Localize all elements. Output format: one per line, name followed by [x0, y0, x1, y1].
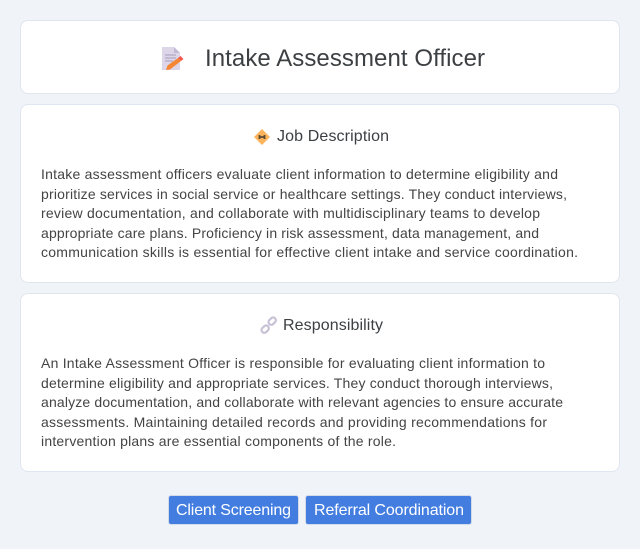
text: job description: prioritize services in social service or healthcare settings. They conduct interviews,	[41, 186, 567, 202]
text: responsibility: analyze documentation, and collaborate with relevant agencies to ensure accurate	[41, 394, 563, 410]
icon: link	[260, 316, 277, 334]
text: responsibility: assessments. Maintaining detailed records and providing recommendations for	[41, 414, 547, 430]
tag: client screening: Client Screening	[176, 502, 291, 519]
tag: client screening	[168, 495, 299, 525]
tag: referral coordination: Referral Coordination	[314, 502, 464, 519]
text: responsibility: determine eligibility and appropriate services. They conduct thorough interviews,	[41, 375, 553, 391]
panel: title	[20, 20, 620, 94]
icon: diamond sign	[254, 129, 270, 145]
text: responsibility	[41, 355, 563, 449]
panel: job description	[20, 104, 620, 283]
tag: referral coordination	[305, 495, 472, 525]
icon: document with pencil	[162, 47, 184, 70]
text: job description: review documentation, and collaborate with multidisciplinary teams to develop	[41, 205, 540, 221]
panel: responsibility	[20, 293, 620, 472]
text: job description	[41, 166, 578, 260]
text: job description: communication skills is essential for effective client intake and service coordination.	[41, 244, 578, 260]
text: responsibility: intervention plans are essential components of the role.	[41, 433, 396, 449]
text: job description: Intake assessment officers evaluate client information to determine eligibility and	[41, 166, 558, 182]
title text: Intake Assessment Officer	[205, 45, 485, 72]
heading: responsibility: Responsibility	[283, 317, 383, 334]
text: job description: appropriate care plans. Proficiency in risk assessment, data management, and	[41, 225, 539, 241]
heading: job description: Job Description	[277, 128, 389, 145]
text: responsibility: An Intake Assessment Officer is responsible for evaluating client information to	[41, 355, 545, 371]
